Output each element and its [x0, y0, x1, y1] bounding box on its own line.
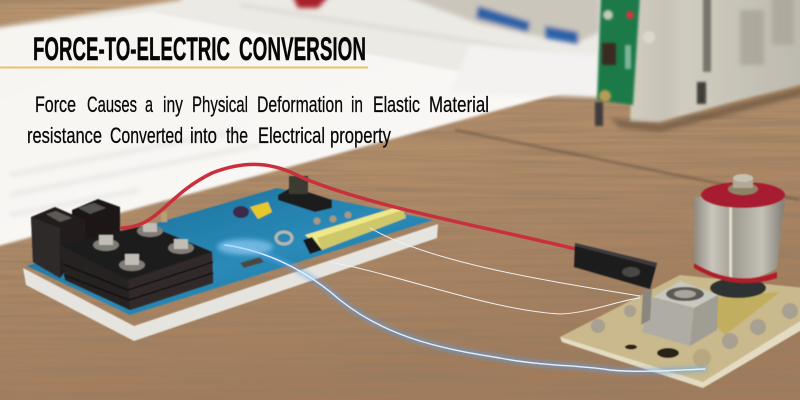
blurred papers in the background	[0, 0, 640, 251]
dark component	[233, 206, 249, 218]
circuit board	[23, 176, 438, 341]
blue electric spark	[217, 239, 705, 371]
title: FORCE-TO-ELECTRIC	[33, 31, 230, 67]
black terminal block	[60, 225, 213, 310]
small resistor	[161, 212, 167, 222]
description text: Physical	[192, 92, 248, 117]
description text: Causes	[87, 92, 137, 117]
description text: a	[145, 92, 153, 117]
description text: property	[330, 123, 392, 148]
description text: iny	[163, 92, 184, 117]
description text	[27, 92, 489, 148]
plate holes and rivets	[591, 319, 605, 333]
black connector blocks	[31, 199, 213, 310]
board: blue top	[27, 188, 433, 315]
description text: Elastic	[373, 92, 420, 117]
description text: in	[351, 92, 363, 117]
title: CONVERSION	[239, 31, 366, 67]
description text: resistance	[27, 123, 102, 148]
title underline	[0, 66, 368, 68]
description text: Material	[429, 92, 489, 117]
force sensor assembly	[560, 174, 800, 388]
black transistor	[303, 237, 322, 254]
yellow capacitor	[250, 202, 272, 219]
black jumper connector	[574, 243, 657, 289]
load cell cylinder	[710, 278, 766, 298]
metal pins	[314, 218, 320, 224]
sensor base plate	[560, 275, 800, 388]
clip	[641, 290, 652, 325]
metal cube	[653, 281, 718, 308]
description text: Electrical	[258, 123, 325, 148]
rear black button switch	[278, 187, 332, 212]
red wire	[122, 164, 576, 249]
blurred instrument box	[595, 0, 800, 132]
description text: the	[226, 123, 248, 148]
description text: Deformation	[257, 92, 343, 117]
terminal screws	[93, 239, 119, 251]
blurred blue and red parts on the rear bench	[292, 0, 600, 44]
description text: into	[190, 123, 217, 148]
description text: Force	[35, 92, 76, 117]
chip	[240, 257, 264, 268]
board: white base	[23, 224, 438, 341]
yellow header strip	[305, 207, 406, 250]
description text: Converted	[110, 123, 183, 148]
ring terminal	[276, 232, 292, 244]
white signal wires	[330, 228, 640, 314]
